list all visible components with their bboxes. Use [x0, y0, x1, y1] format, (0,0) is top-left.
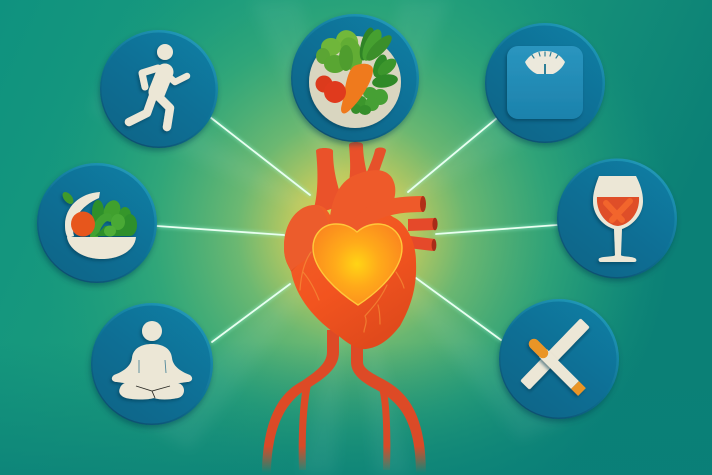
- top and side vessels: [312, 148, 344, 215]
- connector lines from icons to heart: [157, 117, 557, 342]
- icon: wine glass crossed out (limit alcohol): [557, 158, 677, 278]
- left atrium lobe: [284, 205, 329, 271]
- heart veins: [300, 252, 404, 332]
- aortic arch: [329, 170, 395, 232]
- glowing yellow heart: [313, 224, 402, 305]
- heart body: [284, 205, 416, 349]
- lettuce: [316, 26, 366, 73]
- icon: meditating figure (stress management): [91, 303, 213, 425]
- tomatoes: [316, 76, 332, 92]
- anatomical heart illustration: [262, 142, 438, 473]
- spinach leaves: [357, 26, 395, 64]
- lower blood vessels: [262, 330, 426, 473]
- icon: plate with vegetables (diet): [291, 14, 419, 142]
- icon: crossed out cigarette (no smoking): [499, 299, 619, 419]
- icon: weighing scale (weight control): [485, 23, 605, 143]
- icon: runner (exercise): [100, 30, 218, 148]
- carrot: [341, 64, 373, 113]
- icon: bowl of vegetables (healthy food): [37, 163, 157, 283]
- pulmonary artery: [358, 204, 423, 230]
